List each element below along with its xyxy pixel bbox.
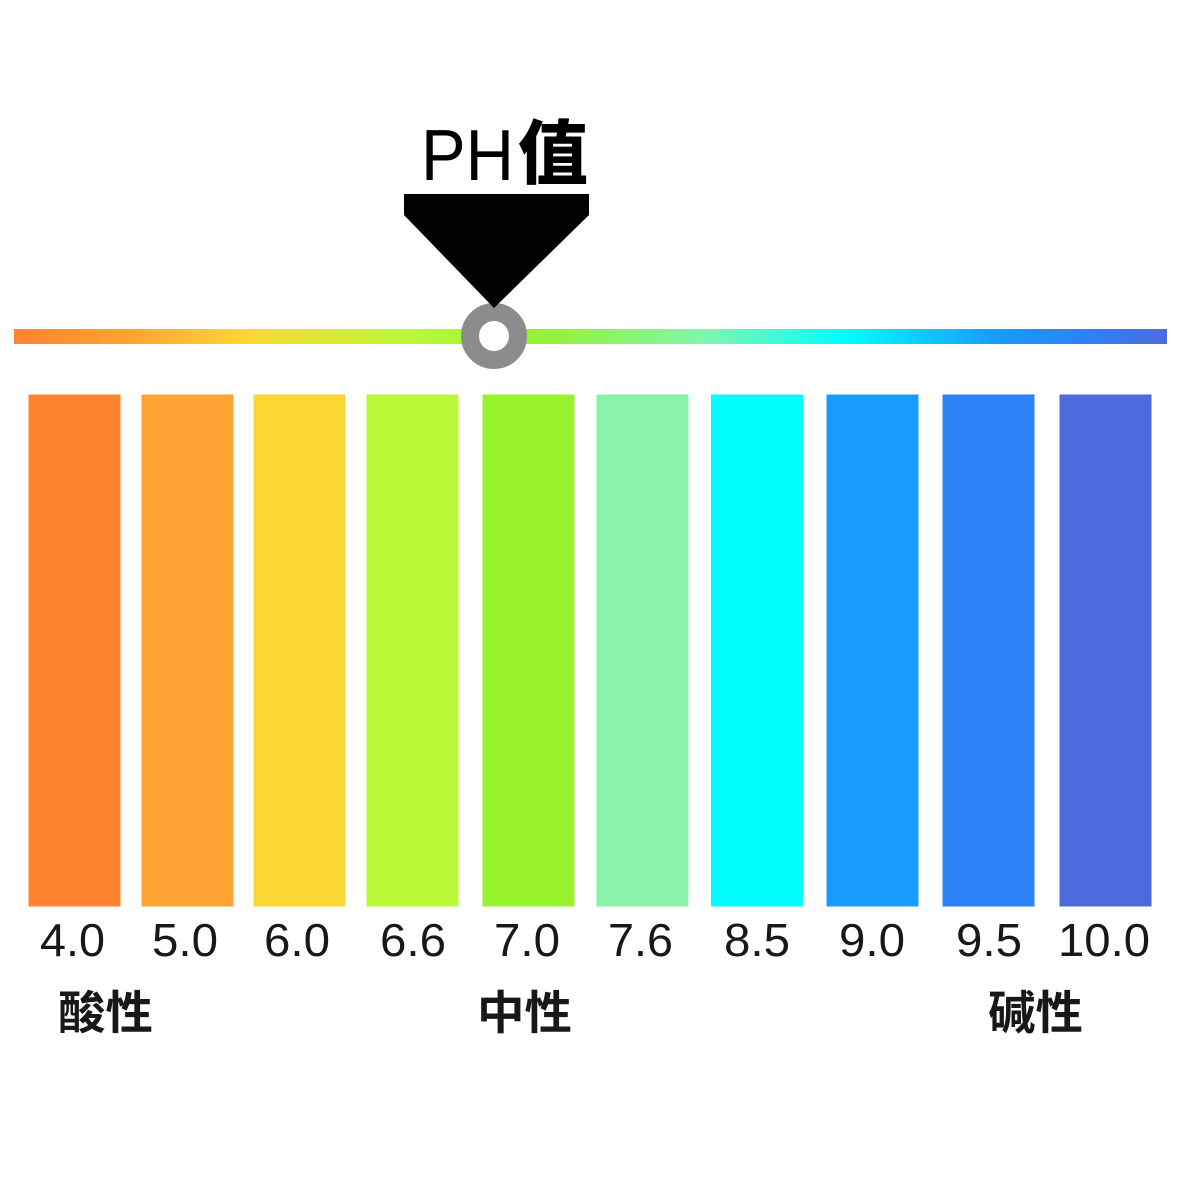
bar chart: pH colour bars <box>28 394 1152 906</box>
label: 6.0: 6.0 <box>264 914 330 966</box>
bar: 4.0 <box>28 394 120 906</box>
bar: 9.5 <box>942 394 1034 906</box>
bar: 7.0 <box>482 394 574 906</box>
label: 5.0: 5.0 <box>152 914 218 966</box>
bar: 10.0 <box>1060 394 1152 906</box>
label: 8.5: 8.5 <box>724 914 790 966</box>
category label: 酸性: 酸性 <box>58 987 153 1039</box>
label: 6.6: 6.6 <box>380 914 446 966</box>
label: 7.0: 7.0 <box>494 914 560 966</box>
title: PH值: PH <box>421 116 514 196</box>
bar: 8.5 <box>711 394 803 906</box>
bar: 7.6 <box>596 394 688 906</box>
ring marker <box>470 312 518 360</box>
category label: 碱性: 碱性 <box>988 987 1083 1039</box>
label: 9.0: 9.0 <box>839 914 905 966</box>
bar: 6.0 <box>254 394 346 906</box>
label: 4.0: 4.0 <box>40 914 105 966</box>
category label: 中性: 中性 <box>477 987 572 1039</box>
label: 7.6: 7.6 <box>608 914 673 966</box>
arrow pointer <box>404 194 589 308</box>
bar: 5.0 <box>142 394 234 906</box>
bar: 9.0 <box>826 394 918 906</box>
pH value labels <box>40 914 1150 966</box>
title: PH值 <box>421 115 588 196</box>
label: 10.0: 10.0 <box>1058 914 1150 966</box>
gradient pH scale line <box>14 329 1167 344</box>
bar: 6.6 <box>366 394 458 906</box>
title: PH值: 值 <box>518 115 588 193</box>
label: 9.5: 9.5 <box>956 914 1022 966</box>
